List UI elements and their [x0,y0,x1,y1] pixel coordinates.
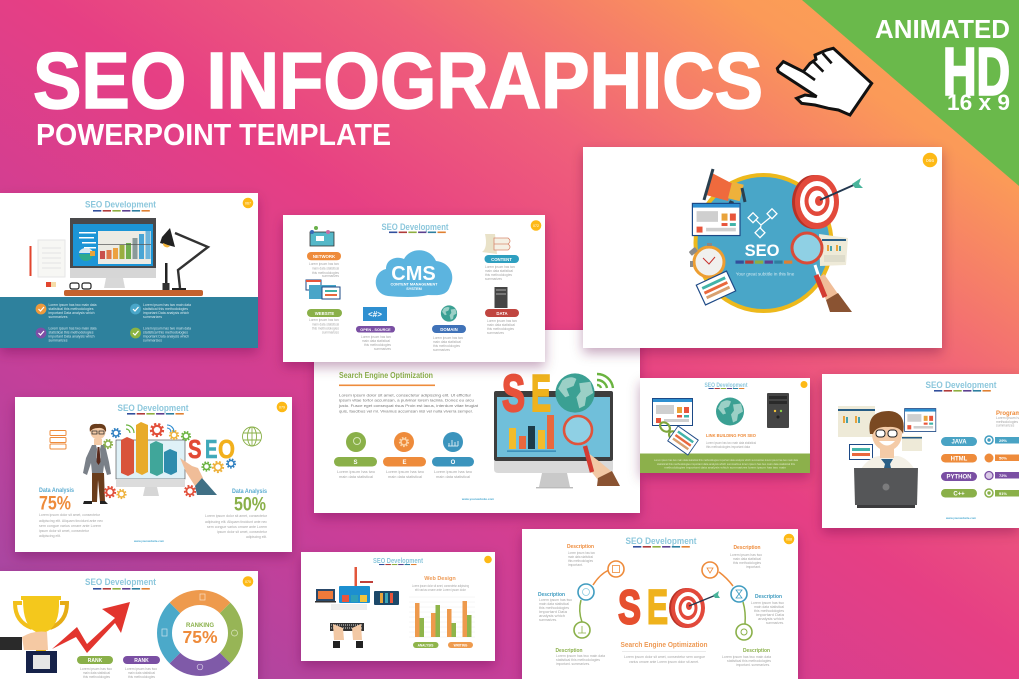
center caption: Search Engine Optimization [620,640,708,649]
center caption: varius ornare ante Lorem ipsum dolor sit amet. [629,660,699,664]
c++ row: C++ [953,492,965,498]
right statistic: ipsum dolor sit amet, consectetur [217,530,268,534]
check item blue: summarizes [143,315,162,319]
description mid right: Description [755,594,783,600]
page badge [484,556,492,563]
domain item: summarizes [433,348,450,352]
blue circle with SEO [696,175,832,311]
html row [941,454,1019,462]
link building text [706,433,756,449]
green corner banner [802,0,1019,186]
check item orange: statistical this methodologies [48,307,94,311]
green band text: methodologies important data analysis which summarizes lorem ipsum has two main [664,466,787,470]
CMS cloud: CONTENT MANAGEMENT [390,282,438,286]
check item green [130,326,191,342]
center caption [620,640,708,664]
java row: JAVA [951,440,967,446]
description mid right: summarizes. [766,621,784,625]
data item: this methodologies [487,327,514,331]
rank pill green: Lorem ipsum has two [80,667,112,671]
subtitle: POWERPOINT TEMPLATE [36,117,391,152]
c++ row [941,489,1019,498]
icon: pixel hand cursor [777,48,872,115]
description mid right: main data statistical [754,605,784,609]
slide: SEO hero circle [583,147,942,348]
check item blue: statistical this methodologies [143,307,188,311]
footer link: www.yourwebsite.com [461,497,494,501]
open source item: Lorem ipsum has two [361,335,391,339]
check item orange: Lorem ipsum has two main data [48,303,97,307]
node green left [574,622,590,638]
right statistic [205,488,268,539]
rank pill purple: RANK [134,658,149,664]
description top left: important. [568,563,583,567]
check item blue [130,303,191,319]
chain and card [658,420,699,456]
network item [307,226,341,278]
website item: main data statistical [312,322,339,326]
domain item: DOMAIN [440,327,458,332]
content item: CONTENT [491,257,512,262]
description mid left: main data statistical [539,602,569,606]
rank pill purple: Lorem ipsum has two [125,667,157,671]
O column: main data statistical [436,475,470,479]
domain item: Lorem ipsum has two [433,336,463,340]
monitor illustration: S [502,365,525,423]
left statistic: Lorem ipsum dolor sit amet, consectetur [39,513,101,517]
data item: Lorem ipsum has two [487,319,517,323]
description bottom left [556,648,605,666]
rank pill purple: main data statistical [128,671,155,675]
right statistic: Lorem ipsum dolor sit amet, consectetur [205,514,268,518]
node orange left [608,561,624,577]
check item green: important Data analysis which [143,334,189,338]
server tower [767,393,789,428]
page badge: 066 [926,158,934,164]
clustered bar chart [409,597,475,637]
paragraph [338,392,479,414]
page badge [923,153,937,167]
large SEO with target: S [618,582,641,634]
node green right [736,624,752,640]
java row: 29% [999,438,1007,443]
monitor with 3D bars [116,422,185,496]
rank donut chart: RANKING [186,623,214,629]
monitor illustration [494,365,620,488]
slide: ranking trophy [0,571,258,679]
right statistic: adipiscing elit. [246,535,267,539]
open source item [356,307,395,351]
programming label: methodologies [996,420,1018,424]
legend pill green: ANALYSIS [418,643,433,647]
check item purple: statistical this methodologies [48,330,94,334]
website item: this methodologies [312,326,339,330]
web design caption: elit varius ornare ante Lorem ipsum dolor [415,588,467,592]
slide: link building [640,378,810,473]
description top right: main data statistical [733,557,761,561]
page badge [243,576,253,587]
web design caption: Web Design [424,576,456,582]
right statistic: sem congue varius ornare ante Lorem [207,525,267,529]
network item: Lorem ipsum has two [309,262,339,266]
red rising arrow [52,602,130,653]
right statistic: Data Analysis [232,488,267,495]
SEO letters [188,434,235,464]
web design caption: Lorem ipsum dolor sit amet, consectetur adipiscing [412,584,469,588]
tilted card [696,270,736,306]
large SEO with target [618,582,720,634]
web design illustration [315,567,399,648]
monitor with chart [70,218,156,288]
S column: Lorem ipsum has two [337,470,375,474]
footer link: www.yourwebsite.com [133,539,165,543]
CMS cloud [376,250,452,297]
network item: main data statistical [312,266,339,270]
heading: SEO Development [704,382,748,389]
pointing hand [180,458,217,495]
heading: SEO Development [85,200,157,210]
target with arrow [792,175,863,229]
description bottom left: Lorem ipsum has two main data [556,654,605,658]
python row: PYTHON [946,475,972,481]
description bottom left: statistical this methodologies [556,658,600,662]
globe [716,398,744,426]
open source item: main data statistical [362,339,390,343]
python row [941,472,1019,481]
description mid left: summarizes. [539,618,557,622]
check item green: Lorem ipsum has two main data [143,326,191,330]
trophy [0,596,67,673]
description top left: Lorem ipsum has two [568,551,595,555]
browser window [692,203,741,236]
check item blue: Lorem ipsum has two main data [143,303,191,307]
paper, pencil and glasses [30,240,91,289]
description bottom right: Description [743,648,771,654]
description bottom left: Description [556,648,583,654]
c++ row: 91% [999,491,1007,496]
link building text: this methodologies important data [706,445,750,449]
paragraph: quis, faucibus vel mi. Vivamus accumsan nisi vel nulla viverra semper. [339,408,473,414]
slide: web design [301,552,495,661]
left statistic: Data Analysis [39,487,74,494]
slide: search engine optimization with monitor [314,330,640,513]
heading: SEO Development [926,380,997,391]
rank donut chart [157,590,243,676]
description bottom left: important. summarizes. [556,662,590,666]
SEO letters: S [188,434,202,464]
page badge [277,402,287,412]
website item [306,280,342,334]
page badge: 072 [533,224,539,228]
left statistic: sem congue varius ornare ante Lorem [39,524,101,528]
gears and wifi [104,424,235,498]
E column: main data statistical [388,475,422,479]
node orange right [702,562,718,578]
megaphone [704,169,745,212]
stopwatch [689,243,724,277]
blue circle with SEO: SEO [745,242,780,260]
green band text: statistical this methodologies important data analysis which summarizes lorem ipsum has two main data statistical this [657,462,796,466]
page badge [800,381,808,388]
page badge [531,220,541,231]
description top right [730,545,762,569]
magnifier and hand [792,233,852,312]
right statistic: 50% [234,494,266,516]
page badge: 068 [786,538,792,542]
heading: SEO Development [118,403,189,414]
description top right: Description [734,545,761,551]
slide: SEO description ring [522,529,798,679]
link building text: Lorem ipsum has two main data statistical [706,441,756,445]
rank pill purple [123,656,160,679]
description mid left: Lorem ipsum has two [539,598,572,602]
website item: summarizes [322,330,339,334]
E column [383,432,426,479]
open source item: summarizes [374,347,391,351]
check item blue: important Data analysis which [143,311,189,315]
footer link: www.yourwebsite.com [945,516,977,520]
connector arcs [580,570,745,624]
description top left: main data statistical [568,555,593,559]
data item: summarizes [487,331,504,335]
network item: NETWORK [313,254,336,259]
content item: Lorem ipsum has two [485,265,515,269]
data item [485,287,519,335]
open source item: <#> [368,310,382,319]
check item green: statistical this methodologies [143,330,188,334]
monitor illustration: E [531,365,551,423]
description bottom right: Lorem ipsum has two main data [722,655,771,659]
desk [64,290,203,296]
green band text: Lorem ipsum has two main data statistical this methodologies important data analysis which summarizes lorem ipsum has two main data [654,458,798,462]
heading: SEO Development [85,577,157,588]
O column [432,432,474,479]
banner label: animated: ANIMATED [875,14,1010,44]
node blue left [578,584,594,600]
open source item: this methodologies [364,343,391,347]
check item orange: important Data analysis which [48,311,95,315]
center caption: Lorem ipsum dolor sit amet, consectetur sem congue [624,655,705,659]
left statistic: adipiscing elit. Aliquam tincidunt ante nec [39,519,103,523]
left statistic: ipsum dolor sit amet, consectetur [39,529,90,533]
python row: 72% [999,473,1007,478]
description mid right: Lorem ipsum has two [751,601,784,605]
network item: summarizes [322,274,339,278]
blue circle with SEO: Your great subtitle in this line [736,272,795,276]
domain item [432,305,466,352]
E column: E [402,460,407,466]
check item purple: important Data analysis which [48,334,95,338]
main title: SEO INFOGRAPHICS [33,36,763,125]
content item: this methodologies [485,273,512,277]
description top right: important. [746,565,761,569]
left statistic [39,487,103,538]
SEO letters: O [218,434,235,464]
CMS cloud: CMS [391,263,436,285]
description top right: this methodologies [733,561,761,565]
link building text: LINK BUILDING FOR SEO [706,433,756,438]
description top left: Description [567,544,595,550]
check item orange: summarizes [48,315,68,319]
rank pill green: main data statistical [83,671,110,675]
paragraph: justo. Fusce eget consequat risus Proin est lacus, interdum vitae feugiat [338,403,479,408]
left statistic: 75% [39,494,71,514]
heading: SEO Development [382,222,449,233]
SEO letters: E [205,434,218,464]
content item: main data statistical [485,269,513,273]
banner label: 16 x 9: 16 x 9 [947,90,1010,115]
programming label: summarizes [996,424,1015,428]
green band text [654,458,798,470]
description top right: Lorem ipsum has two [730,553,762,557]
description mid right: analysis which [758,617,784,621]
page badge [784,534,794,544]
globe icon [242,427,262,446]
rank pill green [77,656,113,679]
slide: CMS cloud [283,215,545,362]
developer with laptop [838,406,936,508]
description mid left: important Data [539,610,567,614]
heading: SEO Development [373,558,424,565]
rank pill green: this methodologies [83,675,110,679]
desk lamp [160,228,208,290]
open source item: OPEN - SOURCE [360,328,391,332]
domain item: this methodologies [433,344,460,348]
O column: O [451,460,456,466]
description mid right: this methodologies [754,609,784,613]
description mid right: important Data [756,613,784,617]
check item green: summarizes [143,338,162,342]
browser window [652,398,693,426]
description mid right [751,594,784,625]
website item: Lorem ipsum has two [309,318,339,322]
description bottom right: statistical this methodologies [727,659,771,663]
content item [482,234,519,281]
left statistic: adipiscing elit. [39,534,61,538]
legend pill orange [448,642,473,648]
rank pill purple: this methodologies [128,675,155,679]
data item: DATA [496,311,508,316]
O column: Lorem ipsum has two [434,470,472,474]
S column: main data statistical [339,475,373,479]
legend pill green [413,642,438,648]
page badge: 067 [245,202,251,206]
check item purple [36,326,97,342]
S column: S [353,460,358,466]
heading: SEO Development [626,536,697,547]
web design caption [412,576,469,592]
content item: summarizes [485,277,502,281]
slide: desk and monitor [0,193,258,348]
server icon [50,430,66,449]
check item purple: summarizes [48,338,68,342]
rank pill green: RANK [88,658,103,664]
description mid left: analysis which [539,614,565,618]
page badge: 079 [279,406,285,410]
node blue right [731,586,747,602]
slide: data analysis [15,397,292,552]
html row: 50% [999,456,1007,460]
slide: programming languages [822,374,1019,528]
E column: Lorem ipsum has two [386,470,424,474]
network item: this methodologies [312,271,339,275]
check item purple: Lorem ipsum has two main data [48,326,97,330]
document behind magnifier [819,234,848,266]
large SEO with target: E [647,582,668,634]
businessman [83,424,111,504]
programming label [996,411,1019,428]
heading: Search Engine Optimization [339,370,433,380]
description mid left: this methodologies [539,606,569,610]
page badge: 070 [245,580,251,584]
description mid left: Description [538,592,566,598]
paragraph: Lorem ipsum dolor sit amet, consectetur adipiscing elit. Ut efficitur [339,392,472,398]
check item orange [36,303,97,319]
page badge [243,198,253,208]
data item: main data statistical [487,323,515,327]
paragraph: ipsum vitae tortor accumsan, a pulvinar lorem lacinia. Donec eu arcu [339,398,474,402]
description bottom right: important. summarizes. [736,663,770,667]
description bottom right [722,648,771,667]
html row: HTML [951,456,968,462]
description top left: this methodologies [568,559,593,563]
CMS cloud: SYSTEM [406,287,422,291]
java row [941,436,1019,446]
description top left [567,544,595,567]
legend pill orange: WRITING [454,643,468,647]
S column [334,432,377,479]
description mid left [538,592,572,622]
right statistic: adipiscing elit. Aliquam tincidunt ante nec [205,520,267,524]
domain item: main data statistical [433,340,461,344]
website item: WEBSITE [315,311,334,316]
rank donut chart: 75% [182,627,218,647]
